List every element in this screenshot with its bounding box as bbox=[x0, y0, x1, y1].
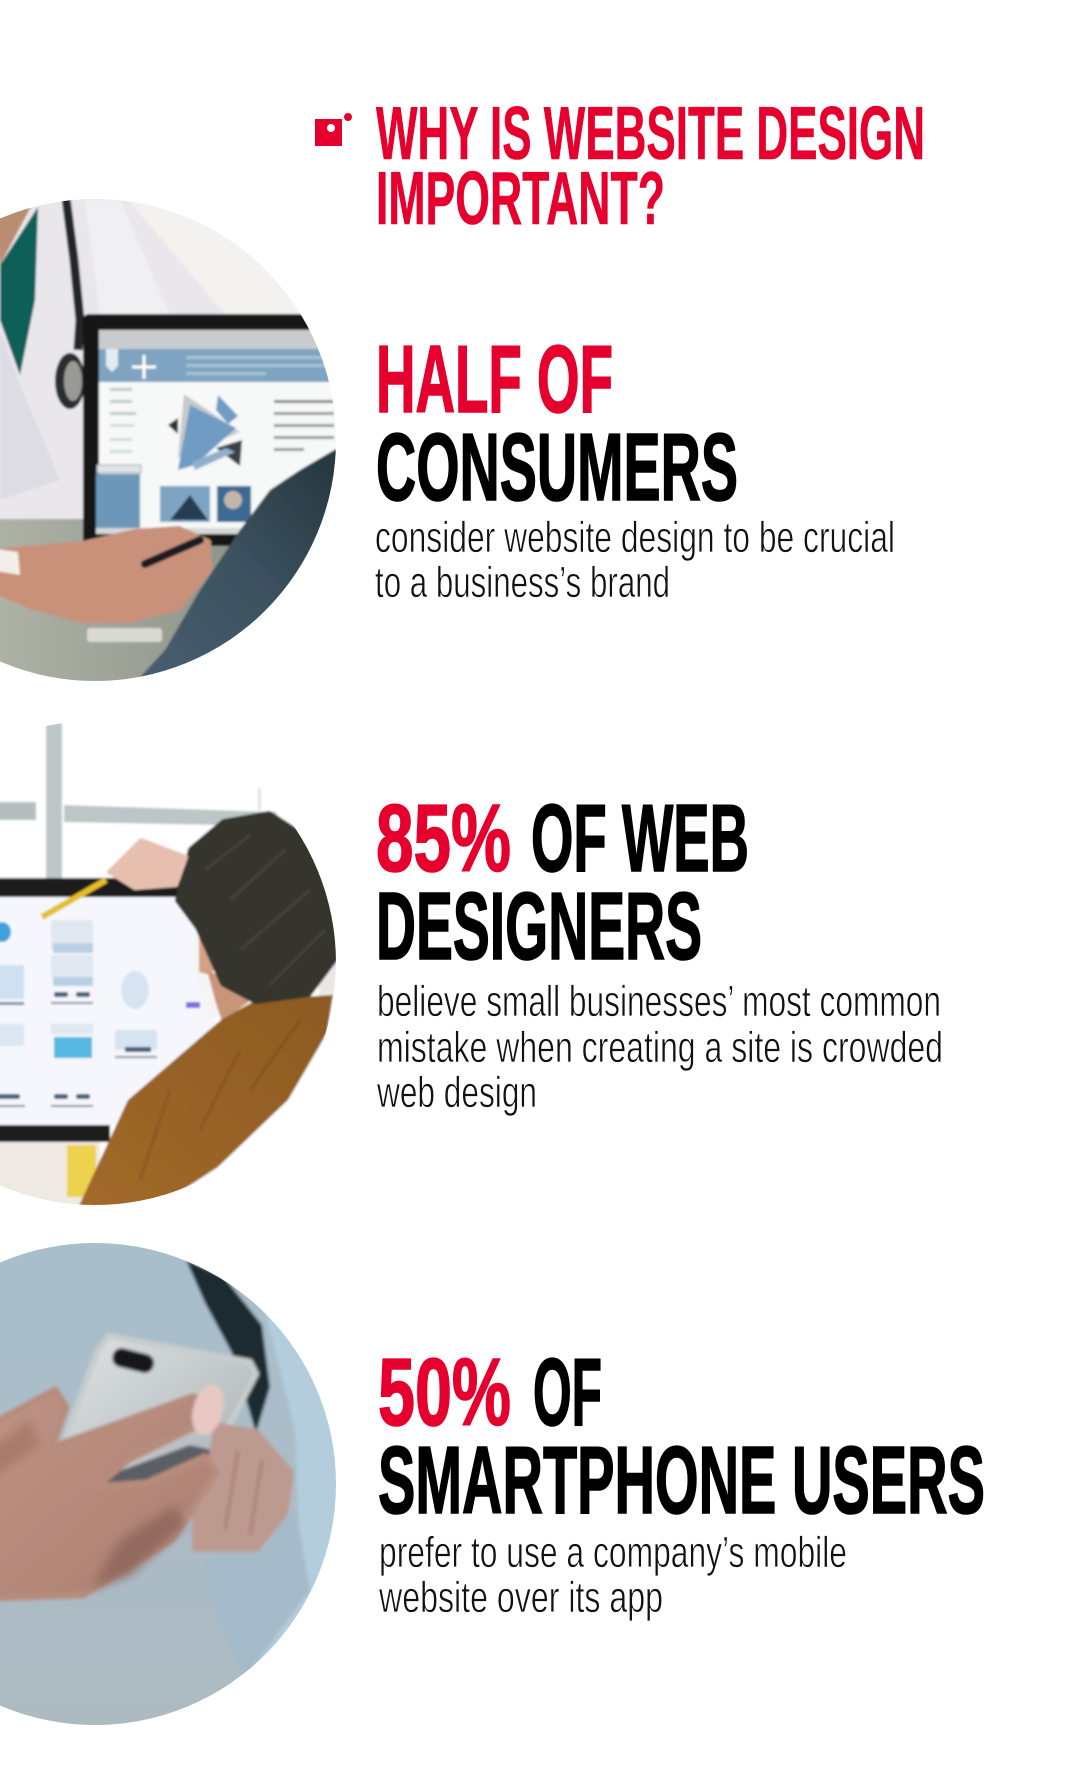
photo: doctor with tablet bbox=[0, 190, 353, 690]
photo: designer at monitor bbox=[0, 715, 350, 1215]
stat 2 heading: OF WEB bbox=[531, 785, 749, 892]
title: IMPORTANT? bbox=[376, 156, 665, 240]
stat 1 description: consider website design to be crucial bbox=[375, 513, 895, 562]
stat 1 description bbox=[375, 513, 895, 607]
stat 3 heading: OF bbox=[533, 1339, 602, 1446]
stat 1 description: to a business’s brand bbox=[375, 558, 670, 607]
stat 1 heading: CONSUMERS bbox=[376, 414, 738, 521]
stat 2 description: web design bbox=[376, 1068, 537, 1117]
stat 3 heading bbox=[378, 1339, 985, 1534]
stat 1 heading: HALF OF bbox=[376, 326, 613, 433]
stat 1 heading bbox=[376, 326, 738, 521]
title bbox=[376, 91, 925, 240]
photo: hands holding smartphone bbox=[0, 1235, 350, 1735]
stat 2 description bbox=[376, 977, 943, 1117]
stat 3 heading: 50% bbox=[378, 1339, 511, 1446]
stat 3 description: prefer to use a company’s mobile bbox=[379, 1528, 847, 1577]
stat 3 description: website over its app bbox=[378, 1573, 663, 1622]
title icon bbox=[315, 113, 352, 146]
stat 2 heading bbox=[376, 785, 749, 980]
stat 2 heading: DESIGNERS bbox=[376, 873, 702, 980]
stat 3 description bbox=[378, 1528, 847, 1622]
stat 2 heading: 85% bbox=[376, 785, 511, 892]
